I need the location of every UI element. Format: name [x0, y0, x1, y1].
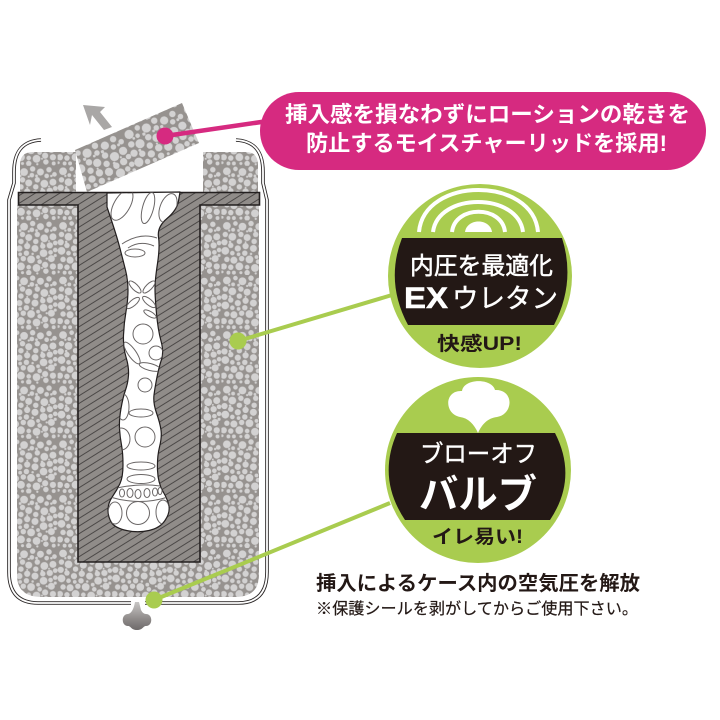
diagram: case cross-section	[9, 103, 267, 630]
icon: puff cloud	[448, 381, 510, 433]
badge: EX urethane: 快感UP!	[437, 332, 522, 355]
callout: moisture lid: 防止するモイスチャーリッドを採用!	[306, 131, 667, 156]
icon: air puff	[123, 602, 151, 630]
inner sleeve and flange	[18, 192, 260, 562]
badge: blow-off valve: イレ易い!	[432, 527, 523, 548]
callout: lid connector	[156, 120, 275, 144]
arrow: lid removal	[83, 105, 112, 130]
foam body	[17, 205, 259, 597]
text: seal note: ※保護シールを剥がしてからご使用下さい。	[316, 600, 638, 618]
badge: blow-off valve	[385, 377, 571, 563]
callout: moisture lid: 挿入感を損なわずにローションの乾きを	[285, 102, 690, 127]
icon: pressure arcs	[419, 190, 538, 232]
moisture lid	[75, 103, 199, 192]
leader line: valve	[146, 503, 390, 608]
foam top left	[20, 152, 76, 192]
case outline	[9, 140, 267, 603]
badge: EX urethane: ウレタン	[452, 284, 558, 314]
insertion cavity	[107, 186, 181, 532]
band	[395, 238, 567, 325]
leader line: urethane	[230, 295, 392, 350]
badge: EX urethane: 内圧を最適化	[410, 253, 553, 280]
badge: blow-off valve: ブローオフ	[420, 441, 537, 468]
text: air pressure release: 挿入によるケース内の空気圧を解放	[316, 572, 640, 595]
badge: EX urethane	[388, 184, 572, 368]
callout: moisture lid	[260, 92, 706, 170]
foam top right	[203, 152, 258, 192]
badge: EX urethane: EX	[404, 282, 448, 315]
badge: blow-off valve: バルブ	[419, 473, 537, 517]
band	[389, 433, 565, 520]
